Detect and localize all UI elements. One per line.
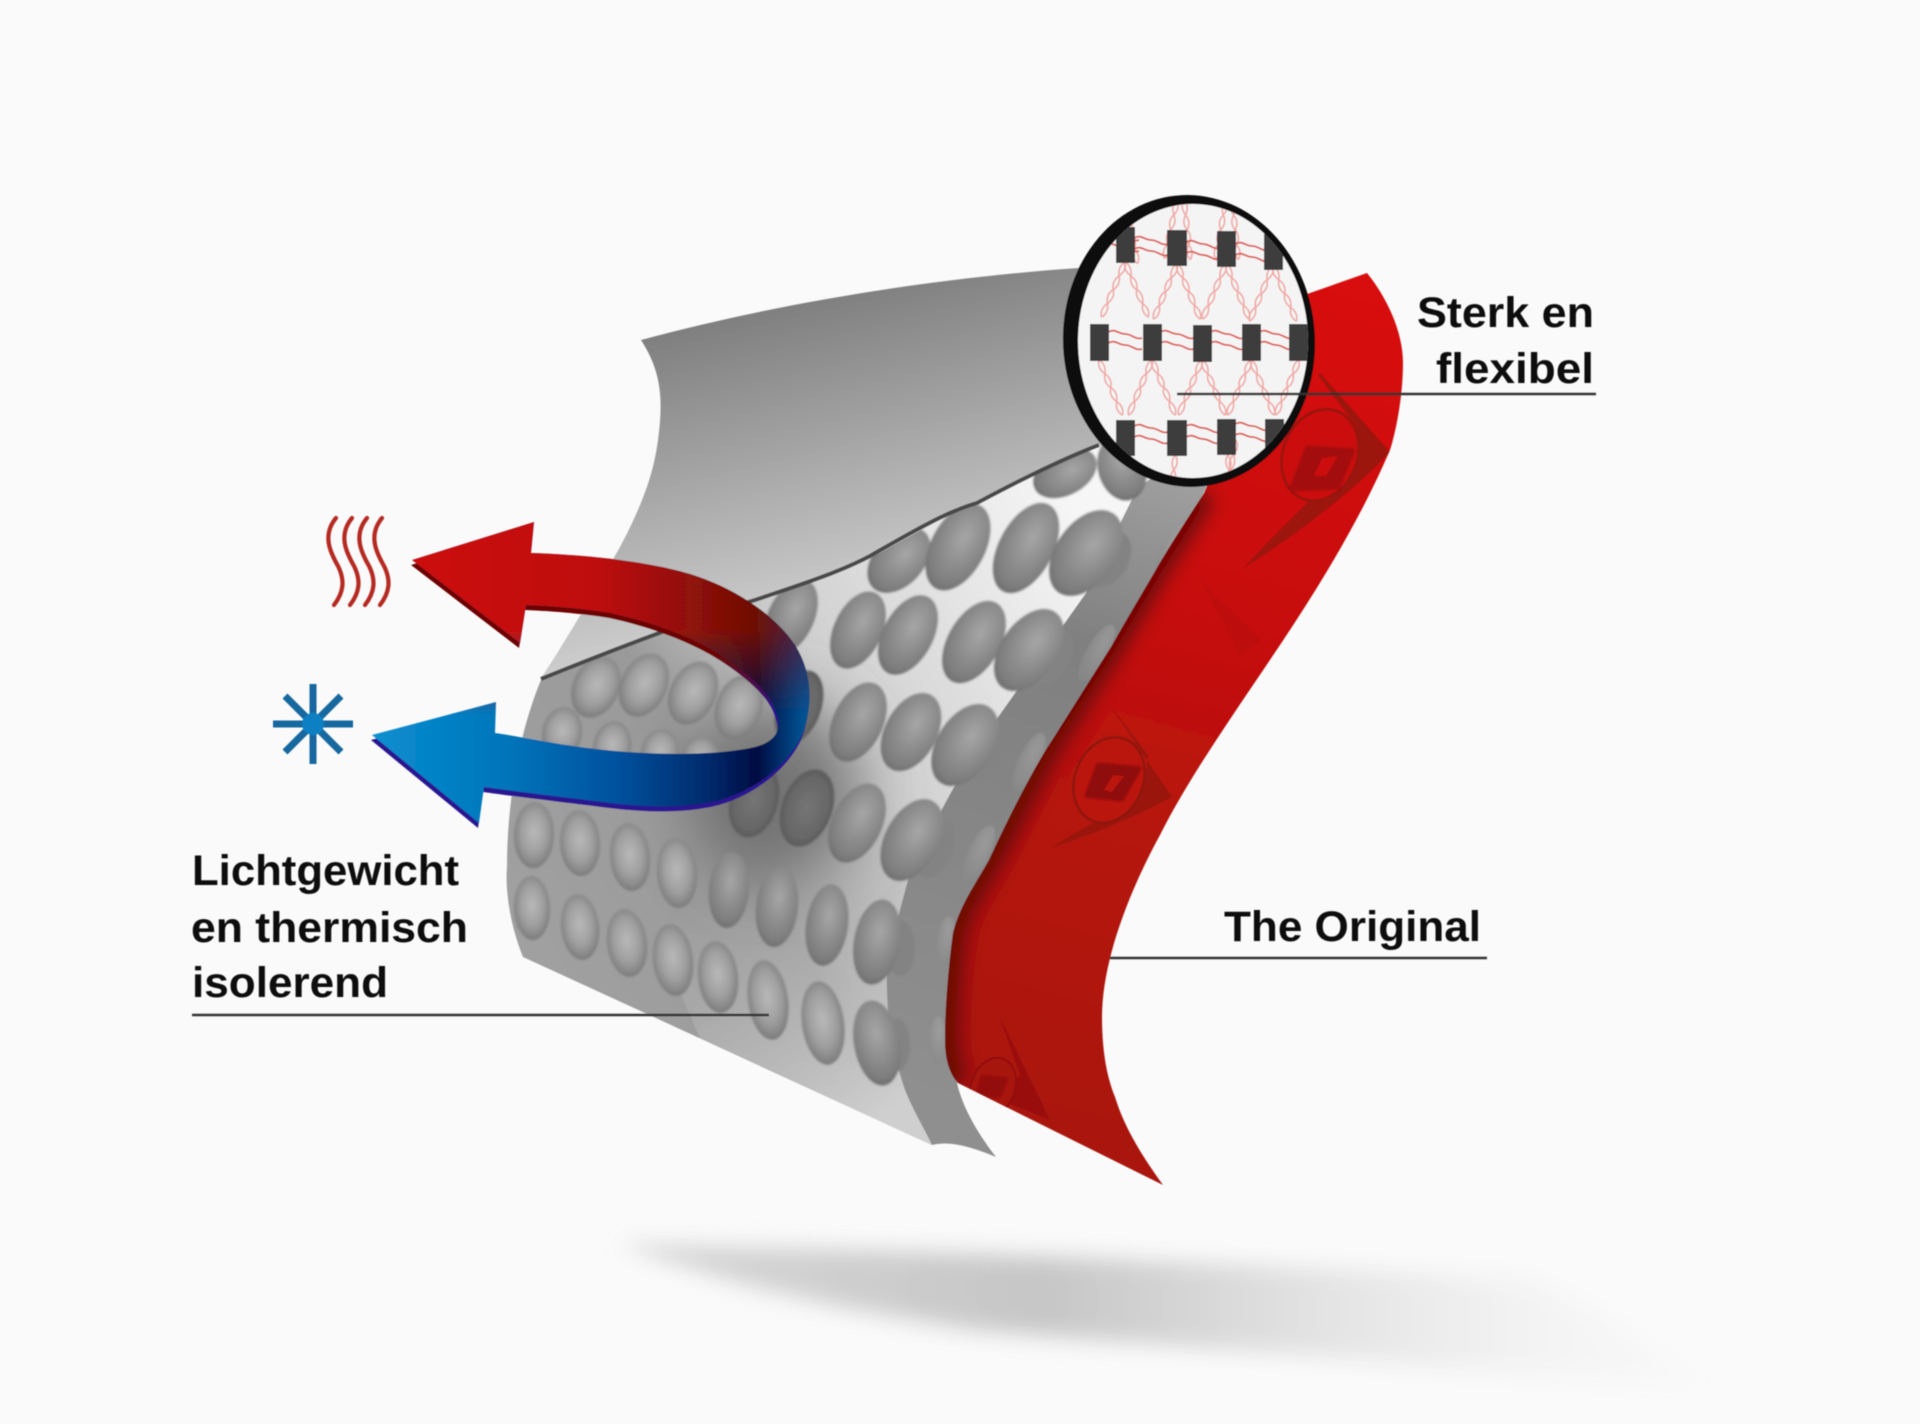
small dimples on band bbox=[930, 518, 1194, 1064]
Dunlop logo middle bbox=[1051, 707, 1172, 848]
label: lightweight and thermally insulating: Lichtgewicht bbox=[192, 847, 459, 895]
dimples row under red arrow bbox=[542, 653, 764, 755]
label: the original: The Original bbox=[1224, 903, 1481, 951]
label: strong and flexible: flexibel bbox=[1436, 345, 1594, 393]
red outer layer bbox=[945, 273, 1403, 1185]
dimples bbox=[513, 430, 1154, 1089]
Dunlop logo faint bbox=[1218, 612, 1250, 629]
arrow thickness edge bbox=[371, 527, 809, 828]
label: lightweight and thermally insulating bbox=[191, 847, 769, 1015]
icon: heat waves bbox=[328, 518, 389, 605]
seam line bbox=[541, 445, 1099, 679]
upper grey fabric sheet bbox=[541, 268, 1120, 678]
Dunlop logo lower bbox=[969, 1017, 1050, 1120]
label: strong and flexible bbox=[1177, 289, 1596, 394]
double arrow: warmth and cold bbox=[371, 522, 810, 828]
lower dimpled insulation sheet bbox=[507, 445, 1160, 1145]
horizontal threads bbox=[1105, 233, 1293, 443]
label: lightweight and thermally insulating: en thermisch bbox=[191, 904, 468, 952]
Dunlop logo upper bbox=[1244, 373, 1390, 568]
diagonal threads bbox=[1097, 199, 1301, 500]
label: lightweight and thermally insulating: isolerend bbox=[192, 959, 388, 1007]
grey backing band bbox=[887, 460, 1210, 1157]
inner edge shadow bbox=[945, 493, 1204, 1083]
dark dimples beside arrow bend bbox=[728, 669, 836, 848]
icon: snowflake bbox=[273, 684, 353, 764]
black fibre blocks bbox=[1090, 227, 1308, 456]
ground shadow bbox=[620, 1243, 1727, 1390]
dimples lower rows bbox=[513, 801, 850, 1068]
label: strong and flexible: Sterk en bbox=[1417, 289, 1594, 337]
dimple side lobes bbox=[896, 535, 1131, 1072]
red arrow bbox=[412, 521, 810, 713]
illustration wrapper bbox=[191, 194, 1597, 1365]
dimples row near circle bbox=[753, 430, 1154, 892]
magnifier circle bbox=[1062, 194, 1316, 488]
blue arrow bbox=[372, 522, 810, 823]
